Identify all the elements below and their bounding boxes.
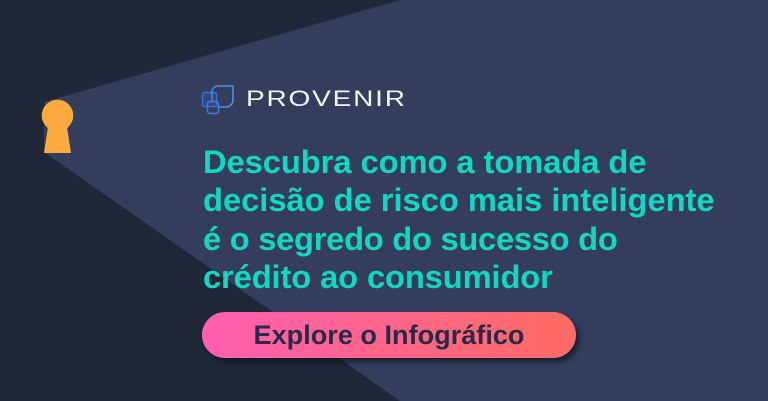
headline: é o segredo do sucesso do [203,220,618,257]
button: Explore o Infográfico: Explore o Infográfico [254,319,524,350]
logo: Provenir [202,85,407,114]
headline: crédito ao consumidor [203,258,553,295]
logo wordmark: PROVENIR [246,86,407,111]
headline: decisão de risco mais inteligente [203,181,715,218]
button: Explore o Infográfico [202,312,576,358]
icon: keyhole [42,100,74,153]
icon: logo squares [202,85,234,114]
headline: Descubra como a tomada de [203,143,646,180]
